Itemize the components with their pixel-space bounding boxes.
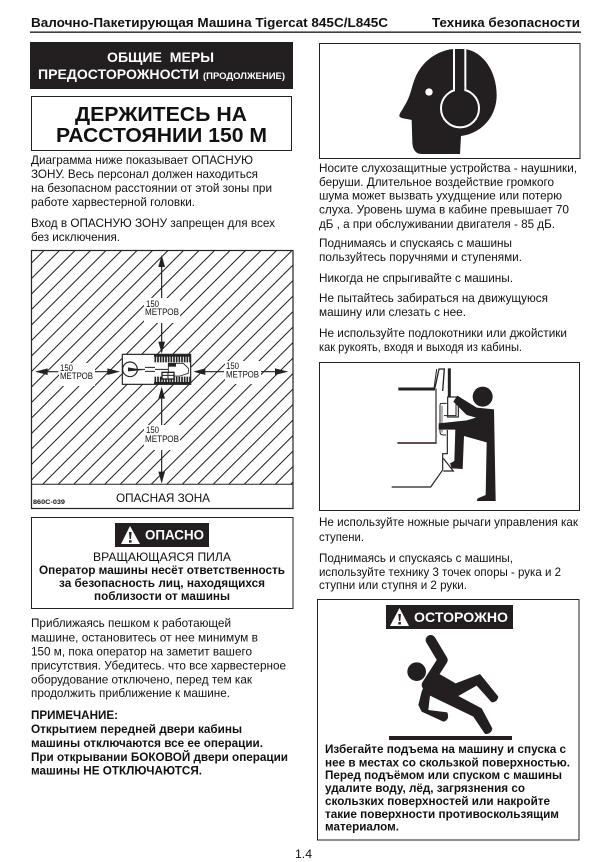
- caution label: ОСТОРОЖНО: [414, 609, 508, 625]
- text block: hearing and climbing advice: как рукоять, входя и выходя из кабины.: [319, 340, 522, 354]
- heading box: keep 150 m away: [32, 96, 292, 150]
- section heading: general precautions: [30, 42, 293, 89]
- labels: 150 metres: МЕТРОВ: [145, 307, 179, 318]
- labels: 150 metres: 150: [60, 363, 73, 374]
- panel: danger rotating saw: поблизости от машины: [94, 589, 230, 603]
- text block: danger zone intro: на безопасном расстоянии от этой зоны при: [31, 181, 272, 195]
- page number: 1.4: [295, 847, 312, 861]
- note: [31, 708, 288, 778]
- text block: approaching the machine: Приближаясь пешком к работающей: [31, 616, 231, 630]
- caution text: удалите воду, лёд, загрязнения со: [325, 781, 525, 795]
- page header: Валочно-Пакетирующая Машина Tigercat 845C/L845C: [31, 15, 389, 30]
- panel: caution slippery surfaces: [318, 600, 579, 840]
- section heading: general precautions: ПРЕДОСТОРОЖНОСТИ: [38, 66, 199, 82]
- labels: 150 metres: [59, 298, 261, 450]
- text block: hearing and climbing advice: Не используйте подлокотники или джойстики: [319, 326, 567, 340]
- panel: danger rotating saw: за безопасность лиц, находящихся: [59, 576, 265, 590]
- labels: 150 metres: 150: [146, 299, 159, 310]
- caption: danger zone: ОПАСНАЯ ЗОНА: [116, 491, 210, 505]
- caution text: скользких поверхностей или накройте: [325, 794, 550, 808]
- panel: hearing protection icon: [320, 44, 580, 158]
- text block: foot controls and three-point contact: Не используйте ножные рычаги управления как: [319, 515, 579, 529]
- text block: hearing and climbing advice: Носите слухозащитные устройства - наушники,: [319, 161, 577, 175]
- text block: hearing and climbing advice: [319, 161, 577, 354]
- text block: hearing and climbing advice: слуха. Уровень шума в кабине превышает 70: [319, 202, 569, 216]
- panel: person climbing into cab: [320, 362, 580, 510]
- icon: falling person: [407, 640, 498, 734]
- caution text: [325, 742, 570, 834]
- arrows: 150 metre distances: [35, 255, 288, 484]
- panel: danger rotating saw: [32, 518, 293, 608]
- text block: foot controls and three-point contact: Поднимаясь и спускаясь с машины,: [319, 551, 513, 565]
- note: При открывании БОКОВОЙ двери операции: [31, 749, 288, 764]
- labels: 150 metres: МЕТРОВ: [145, 434, 179, 445]
- figure code: 860C-039: [33, 499, 65, 506]
- text block: foot controls and three-point contact: ступни или ступня и 2 руки.: [319, 578, 467, 592]
- text block: hearing and climbing advice: Поднимаясь и спускаясь с машины: [319, 236, 512, 250]
- text block: danger zone intro: Вход в ОПАСНУЮ ЗОНУ запрещен для всех: [31, 216, 275, 230]
- section heading: general precautions: (ПРОДОЛЖЕНИЕ): [203, 71, 285, 81]
- note: Открытием передней двери кабины: [31, 722, 242, 736]
- text block: hearing and climbing advice: Не пытайтесь забираться на движущуюся: [319, 291, 548, 305]
- labels: 150 metres: МЕТРОВ: [60, 371, 93, 382]
- text block: hearing and climbing advice: пользуйтесь поручнями и ступенями.: [319, 250, 522, 264]
- caution text: материалом.: [325, 820, 399, 834]
- text block: danger zone intro: без исключения.: [31, 230, 120, 244]
- danger label: ОПАСНО: [145, 526, 204, 542]
- note: ПРИМЕЧАНИЕ:: [31, 708, 118, 722]
- text block: hearing and climbing advice: дБ , а при обслуживании двигателя - 85 дБ.: [319, 217, 555, 231]
- caution text: Перед подъёмом или спуском с машины: [325, 768, 562, 782]
- text block: danger zone intro: [31, 153, 275, 244]
- text block: approaching the machine: машине, остановитесь от нее минимум в: [31, 630, 258, 644]
- diagram: danger zone: [31, 250, 293, 508]
- caution text: Избегайте подъема на машину и спуска с: [325, 742, 566, 756]
- text block: foot controls and three-point contact: [319, 515, 579, 592]
- heading box: keep 150 m away: РАССТОЯНИИ 150 М: [56, 124, 267, 147]
- text block: hearing and climbing advice: беруши. Длительное воздействие громкого: [319, 175, 554, 189]
- note: машины НЕ ОТКЛЮЧАЮТСЯ.: [31, 764, 202, 778]
- text block: approaching the machine: присутствия. Убедитесь. что все харвестерное: [31, 658, 286, 672]
- text block: foot controls and three-point contact: используйте технику 3 точек опоры - рука и 2: [319, 565, 561, 579]
- icon: head with headphones: [399, 49, 497, 154]
- section heading: general precautions: ОБЩИЕ МЕРЫ: [107, 49, 214, 65]
- caution text: такие поверхности противоскользящим: [325, 807, 559, 821]
- danger label: [115, 523, 209, 547]
- labels: 150 metres: 150: [226, 361, 239, 372]
- text block: approaching the machine: [31, 616, 286, 700]
- text block: approaching the machine: оборудование отключено, перед тем как: [31, 672, 253, 686]
- caution text: нее в местах со скользкой поверхностью.: [325, 756, 570, 770]
- text block: hearing and climbing advice: шума может вызвать ухудщение или потерю: [319, 188, 562, 202]
- page header: Техника безопасности: [432, 15, 580, 30]
- text block: hearing and climbing advice: Никогда не спрыгивайте с машины.: [319, 271, 513, 285]
- text block: hearing and climbing advice: машину или слезать с нее.: [319, 305, 466, 319]
- text block: approaching the machine: продолжить приближение к машине.: [31, 686, 230, 700]
- machine top view: [122, 354, 191, 384]
- caution label: [386, 605, 513, 629]
- text block: foot controls and three-point contact: ступени.: [319, 530, 364, 544]
- page header: [30, 15, 581, 33]
- text block: danger zone intro: работе харвестерной головки.: [31, 195, 195, 209]
- labels: 150 metres: МЕТРОВ: [226, 370, 259, 380]
- labels: 150 metres: 150: [146, 425, 159, 436]
- text block: danger zone intro: ЗОНУ. Весь персонал должен находиться: [31, 167, 258, 181]
- illustration: climbing figure: [392, 368, 496, 501]
- note: машины отключаются все ее операции.: [31, 736, 263, 750]
- panel: danger rotating saw: Оператор машины несёт ответственность: [39, 563, 285, 577]
- text block: danger zone intro: Диаграмма ниже показывает ОПАСНУЮ: [31, 153, 253, 167]
- text block: approaching the machine: 150 м, пока оператор на заметит вашего: [31, 644, 252, 658]
- floor bar: [389, 736, 512, 740]
- heading box: keep 150 m away: ДЕРЖИТЕСЬ НА: [75, 103, 247, 126]
- panel: danger rotating saw: ВРАЩАЮЩАЯСЯ ПИЛА: [93, 550, 231, 564]
